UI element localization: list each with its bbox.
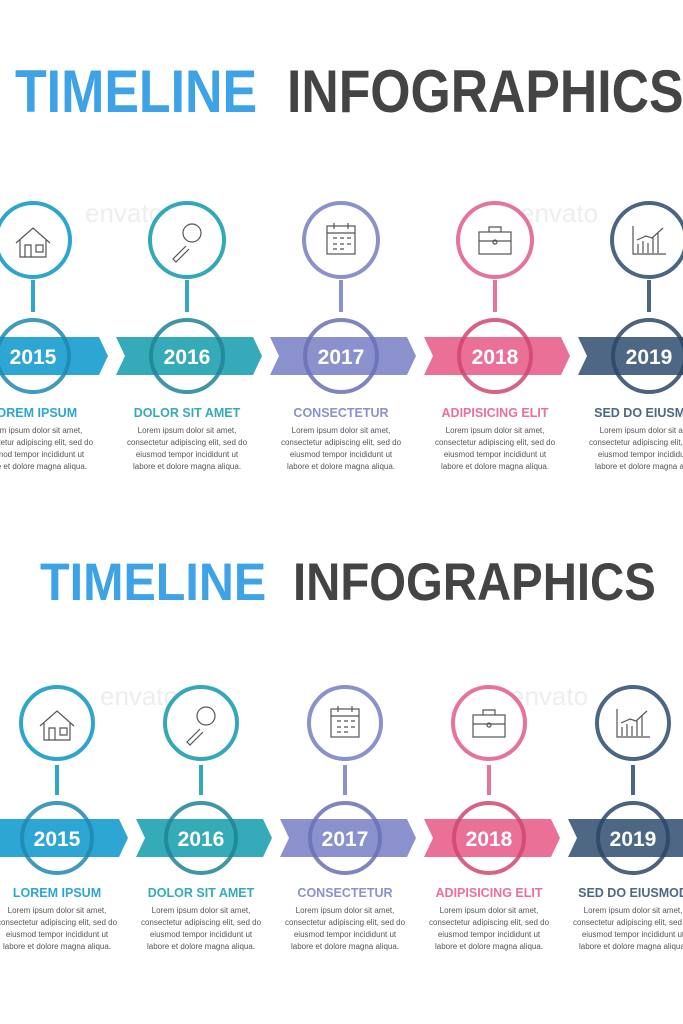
step 2017: labore et dolore magna aliqua. — [287, 462, 395, 471]
step 2016 b: eiusmod tempor incididunt ut — [150, 930, 253, 939]
step 2018 b: labore et dolore magna aliqua. — [435, 942, 543, 951]
step 2016 — [116, 203, 262, 471]
step 2017: consectetur adipiscing elit, sed do — [281, 438, 402, 447]
step 2015 b: eiusmod tempor incididunt ut — [6, 930, 109, 939]
step 2017 b: labore et dolore magna aliqua. — [291, 942, 399, 951]
step 2018 b — [424, 687, 560, 951]
title 1: INFOGRAPHICS — [287, 57, 683, 125]
step 2017 b: CONSECTETUR — [297, 886, 393, 900]
step 2018 b: consectetur adipiscing elit, sed do — [429, 918, 550, 927]
step 2019 b — [568, 687, 683, 951]
step 2018 b: ADIPISICING ELIT — [436, 886, 543, 900]
title 2: TIMELINE — [40, 552, 266, 611]
step 2018 b: eiusmod tempor incididunt ut — [438, 930, 541, 939]
step 2017: CONSECTETUR — [293, 406, 389, 420]
step 2016 b: 2016 — [178, 828, 224, 851]
step 2015: 2015 — [10, 346, 57, 369]
step 2016 b — [136, 687, 272, 951]
step 2017: eiusmod tempor incididunt ut — [290, 450, 393, 459]
step 2019 b: Lorem ipsum dolor sit amet, — [584, 906, 682, 915]
watermark: envato — [100, 681, 178, 711]
watermark: envato — [520, 198, 598, 228]
watermark — [85, 198, 598, 711]
section 1 timeline — [0, 203, 683, 471]
step 2016: consectetur adipiscing elit, sed do — [127, 438, 248, 447]
step 2016 b: consectetur adipiscing elit, sed do — [141, 918, 262, 927]
step 2016: eiusmod tempor incididunt ut — [136, 450, 239, 459]
step 2018 b: 2018 — [466, 828, 513, 851]
step 2018 — [424, 203, 570, 471]
step 2017 b: consectetur adipiscing elit, sed do — [285, 918, 406, 927]
step 2017: 2017 — [318, 346, 364, 369]
title 1 — [15, 57, 683, 125]
step 2016 b: labore et dolore magna aliqua. — [147, 942, 255, 951]
section 2 timeline — [0, 687, 683, 951]
step 2015 b — [0, 687, 128, 951]
step 2016 b: DOLOR SIT AMET — [148, 886, 255, 900]
step 2015 b: LOREM IPSUM — [13, 886, 101, 900]
step 2016: Lorem ipsum dolor sit amet, — [138, 426, 236, 435]
title 2 — [40, 552, 656, 612]
step 2017 b: Lorem ipsum dolor sit amet, — [296, 906, 394, 915]
step 2015 b: labore et dolore magna aliqua. — [3, 942, 111, 951]
step 2016 b: Lorem ipsum dolor sit amet, — [152, 906, 250, 915]
step 2019 b: 2019 — [610, 828, 656, 851]
step 2018: Lorem ipsum dolor sit amet, — [446, 426, 544, 435]
step 2018: eiusmod tempor incididunt ut — [444, 450, 547, 459]
step 2017 b: eiusmod tempor incididunt ut — [294, 930, 397, 939]
step 2018: consectetur adipiscing elit, sed do — [435, 438, 556, 447]
title 1: TIMELINE — [15, 57, 257, 125]
title 2: INFOGRAPHICS — [293, 553, 656, 612]
step 2015 b: Lorem ipsum dolor sit amet, — [8, 906, 106, 915]
step 2019 b: eiusmod tempor incididunt ut — [582, 930, 683, 939]
step 2017: Lorem ipsum dolor sit amet, — [292, 426, 390, 435]
step 2018 b: Lorem ipsum dolor sit amet, — [440, 906, 538, 915]
step 2015 — [0, 203, 108, 471]
step 2019 — [578, 203, 683, 471]
step 2017 b: 2017 — [322, 828, 368, 851]
step 2018: ADIPISICING ELIT — [442, 406, 549, 420]
watermark: envato — [510, 681, 588, 711]
step 2015 b: consectetur adipiscing elit, sed do — [0, 918, 118, 927]
step 2017 b — [280, 687, 416, 951]
watermark: envato — [85, 198, 163, 228]
step 2015 b: 2015 — [34, 828, 81, 851]
step 2019: 2019 — [626, 346, 672, 369]
step 2016: 2016 — [164, 346, 210, 369]
step 2018: labore et dolore magna aliqua. — [441, 462, 549, 471]
step 2016: DOLOR SIT AMET — [134, 406, 241, 420]
step 2018: 2018 — [472, 346, 519, 369]
step 2017 — [270, 203, 416, 471]
step 2016: labore et dolore magna aliqua. — [133, 462, 241, 471]
